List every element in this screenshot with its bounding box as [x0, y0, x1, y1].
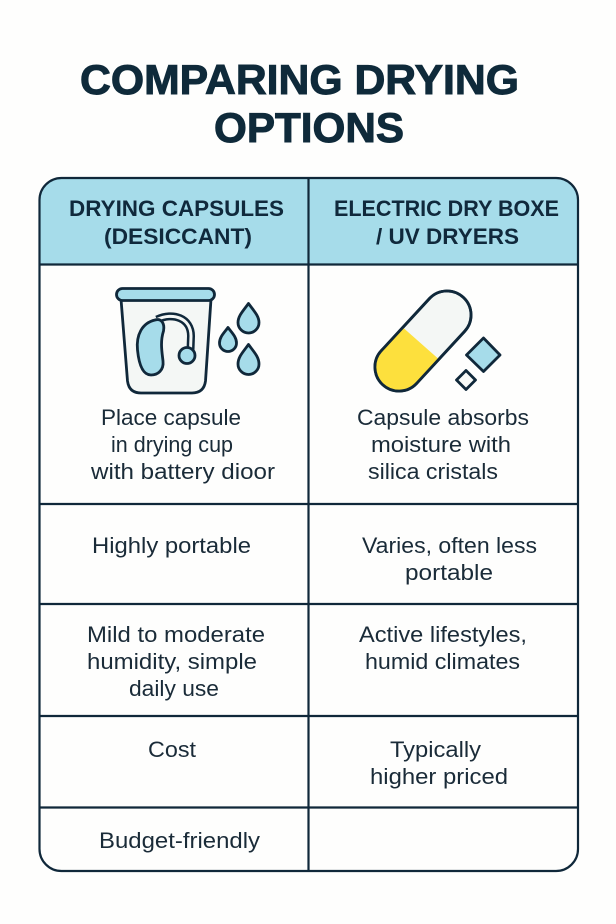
text: place capsule: with battery dioor	[90, 459, 276, 484]
icon: drying cup with hearing aid	[116, 288, 214, 393]
text: mild to moderate: Mild to moderate	[87, 622, 265, 647]
text: varies: Varies, often less	[362, 533, 537, 558]
text: capsule absorbs: Capsule absorbs	[357, 405, 529, 430]
header: drying capsules: DRYING CAPSULES	[69, 196, 284, 221]
text: varies: portable	[405, 560, 493, 585]
text: active lifestyles: humid climates	[365, 649, 520, 674]
text: capsule absorbs: silica cristals	[368, 459, 498, 484]
header: electric dry boxes: ELECTRIC DRY BOXE	[334, 196, 559, 221]
comparison table	[40, 178, 578, 871]
text: capsule absorbs: moisture with	[371, 432, 511, 457]
text: typically higher priced: higher priced	[370, 764, 508, 789]
table frame and grid	[40, 178, 578, 871]
text: varies	[362, 533, 537, 585]
text: place capsule: in drying cup	[111, 432, 233, 457]
text: active lifestyles	[359, 622, 527, 674]
header: electric dry boxes: / UV DRYERS	[376, 224, 519, 249]
text: mild to moderate: daily use	[129, 676, 219, 701]
text: place capsule: Place capsule	[101, 405, 241, 430]
icon: capsule with silica crystals	[375, 291, 500, 391]
text: place capsule	[90, 405, 276, 484]
header: drying capsules: (DESICCANT)	[104, 224, 252, 249]
text: typically higher priced	[370, 737, 508, 789]
text: highly portable: Highly portable	[92, 533, 251, 558]
text: mild to moderate	[87, 622, 265, 701]
title: COMPARING DRYING	[80, 56, 519, 103]
text: capsule absorbs	[357, 405, 529, 484]
title: OPTIONS	[214, 104, 404, 151]
title	[80, 56, 519, 151]
icon: water drops	[220, 304, 259, 374]
text: cost: Cost	[148, 737, 197, 762]
text: typically higher priced: Typically	[390, 737, 482, 762]
text: budget-friendly: Budget-friendly	[99, 828, 261, 853]
table header background	[40, 178, 578, 264]
text: mild to moderate: humidity, simple	[87, 649, 257, 674]
header: drying capsules	[69, 196, 284, 249]
text: active lifestyles: Active lifestyles,	[359, 622, 527, 647]
header: electric dry boxes	[334, 196, 559, 249]
